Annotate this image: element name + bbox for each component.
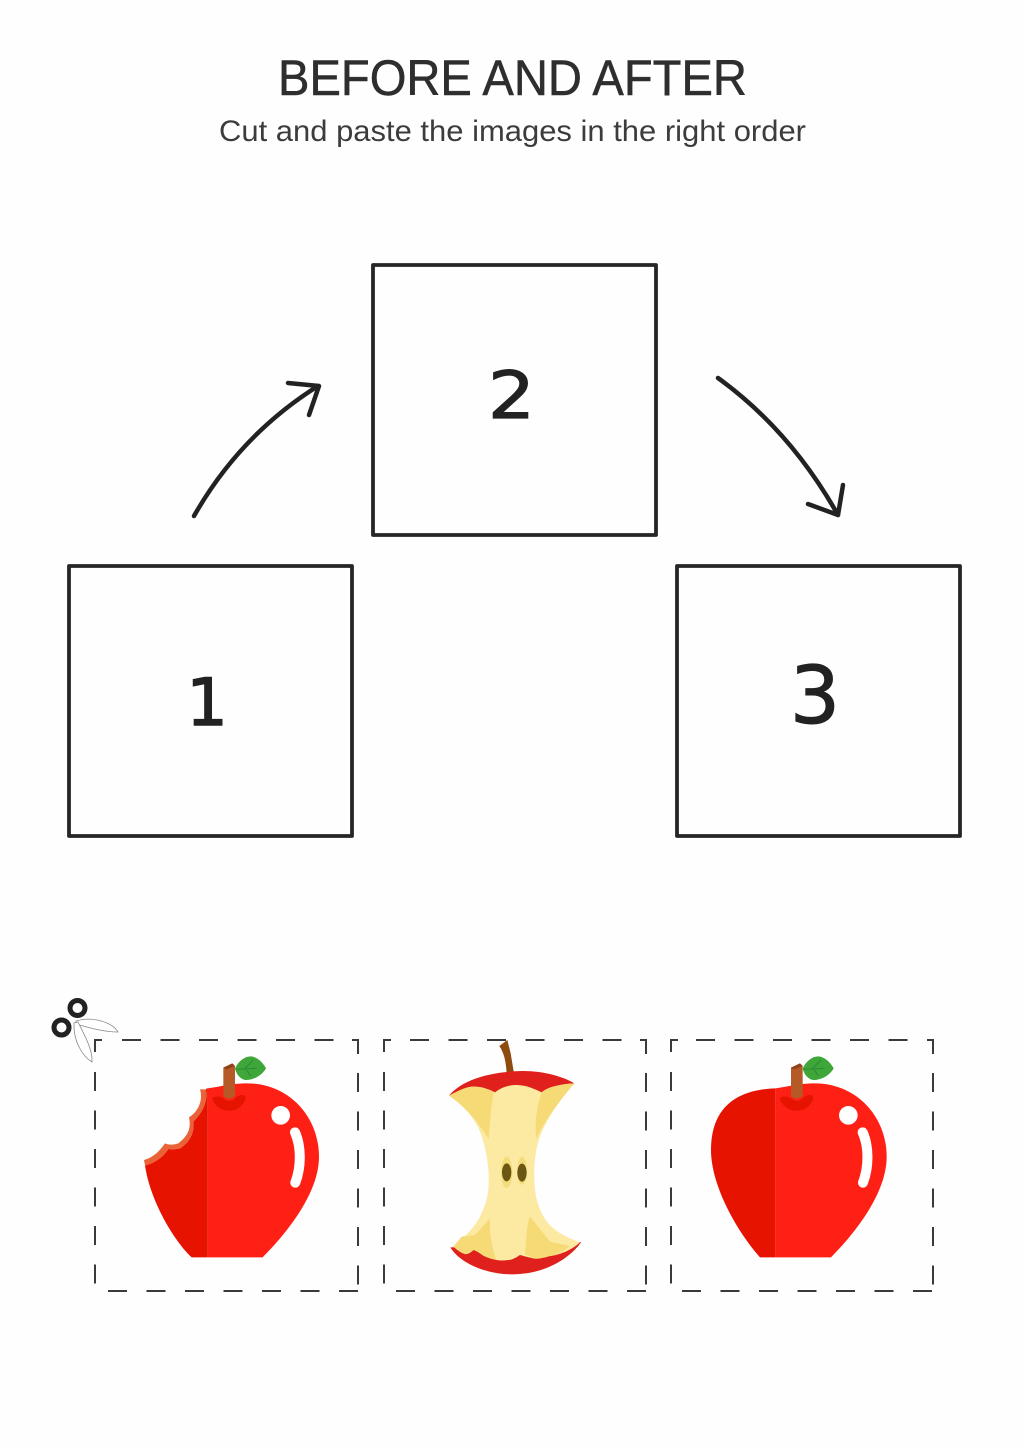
cut-out card 2 dashed border <box>384 1040 647 1291</box>
subtitle: Cut and paste the images in the right order <box>219 115 806 148</box>
icon: scissors <box>54 1000 118 1062</box>
panel: box 1 <box>69 566 352 836</box>
top skin <box>449 1071 574 1096</box>
flesh shadow bottom left <box>453 1218 496 1259</box>
panel: box 3 <box>677 566 960 836</box>
flesh shadow bottom right <box>525 1217 570 1259</box>
flesh shadow top left <box>449 1087 494 1139</box>
flesh <box>449 1083 580 1260</box>
seed halo right <box>517 1157 527 1185</box>
cut-out card 3 dashed border <box>671 1040 933 1291</box>
panel: box 2 <box>373 265 656 535</box>
cut-out card 1 dashed border <box>95 1040 358 1291</box>
stem dimple <box>780 1095 813 1111</box>
stem <box>223 1063 235 1098</box>
seed halo left <box>501 1157 512 1188</box>
flesh shadow top right <box>536 1083 574 1138</box>
number 2: 2 <box>488 359 535 434</box>
highlight circle <box>839 1106 858 1125</box>
seed left <box>502 1163 511 1181</box>
highlight streak <box>295 1132 300 1183</box>
highlight streak <box>863 1132 867 1183</box>
highlight circle <box>271 1106 290 1125</box>
stem <box>791 1063 803 1098</box>
number 1: 1 <box>186 666 228 741</box>
leaf <box>803 1056 834 1080</box>
arrow: box 1 to box 2 <box>194 383 319 516</box>
arrow: box 2 to box 3 <box>718 378 843 515</box>
bite rim <box>144 1089 206 1165</box>
number 3: 3 <box>790 650 840 742</box>
image: bitten apple <box>144 1056 319 1257</box>
leaf <box>235 1056 266 1080</box>
bottom skin <box>450 1242 581 1274</box>
stem <box>499 1040 514 1073</box>
image: apple core <box>449 1040 581 1274</box>
image: whole apple <box>711 1056 887 1257</box>
seed right <box>517 1164 527 1182</box>
title: BEFORE AND AFTER <box>278 50 747 106</box>
stem dimple <box>212 1095 246 1111</box>
